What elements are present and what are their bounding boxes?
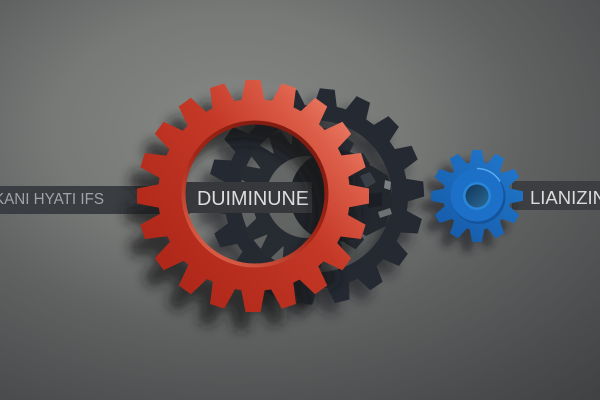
dark inner gear: [236, 125, 378, 269]
red gear body: [137, 80, 369, 312]
blue hub shade: [452, 170, 506, 224]
dark gear: [197, 88, 425, 317]
blue hub hole centre: [466, 184, 488, 208]
centre band text: DUIMINUNE: [197, 188, 309, 210]
blue hub: [450, 168, 504, 222]
dark gear interior shade: [240, 120, 392, 272]
left label band: [0, 186, 190, 214]
blue hub highlight: [477, 168, 500, 182]
red gear shadow: [125, 98, 357, 330]
right label band: [512, 181, 600, 210]
dark hub mass: [290, 150, 382, 242]
dark gear shadow: [197, 99, 415, 317]
dark outer gear body: [207, 88, 425, 305]
red gear: [118, 80, 369, 336]
dark hub fragments: [350, 166, 393, 236]
red ring inner bevel: [184, 122, 326, 266]
blue gear shadow: [421, 160, 513, 252]
blue gear body: [431, 150, 523, 242]
centre band inside red ring: [180, 182, 312, 213]
blue gear: [421, 145, 530, 252]
blue hub hole rim: [463, 182, 491, 210]
